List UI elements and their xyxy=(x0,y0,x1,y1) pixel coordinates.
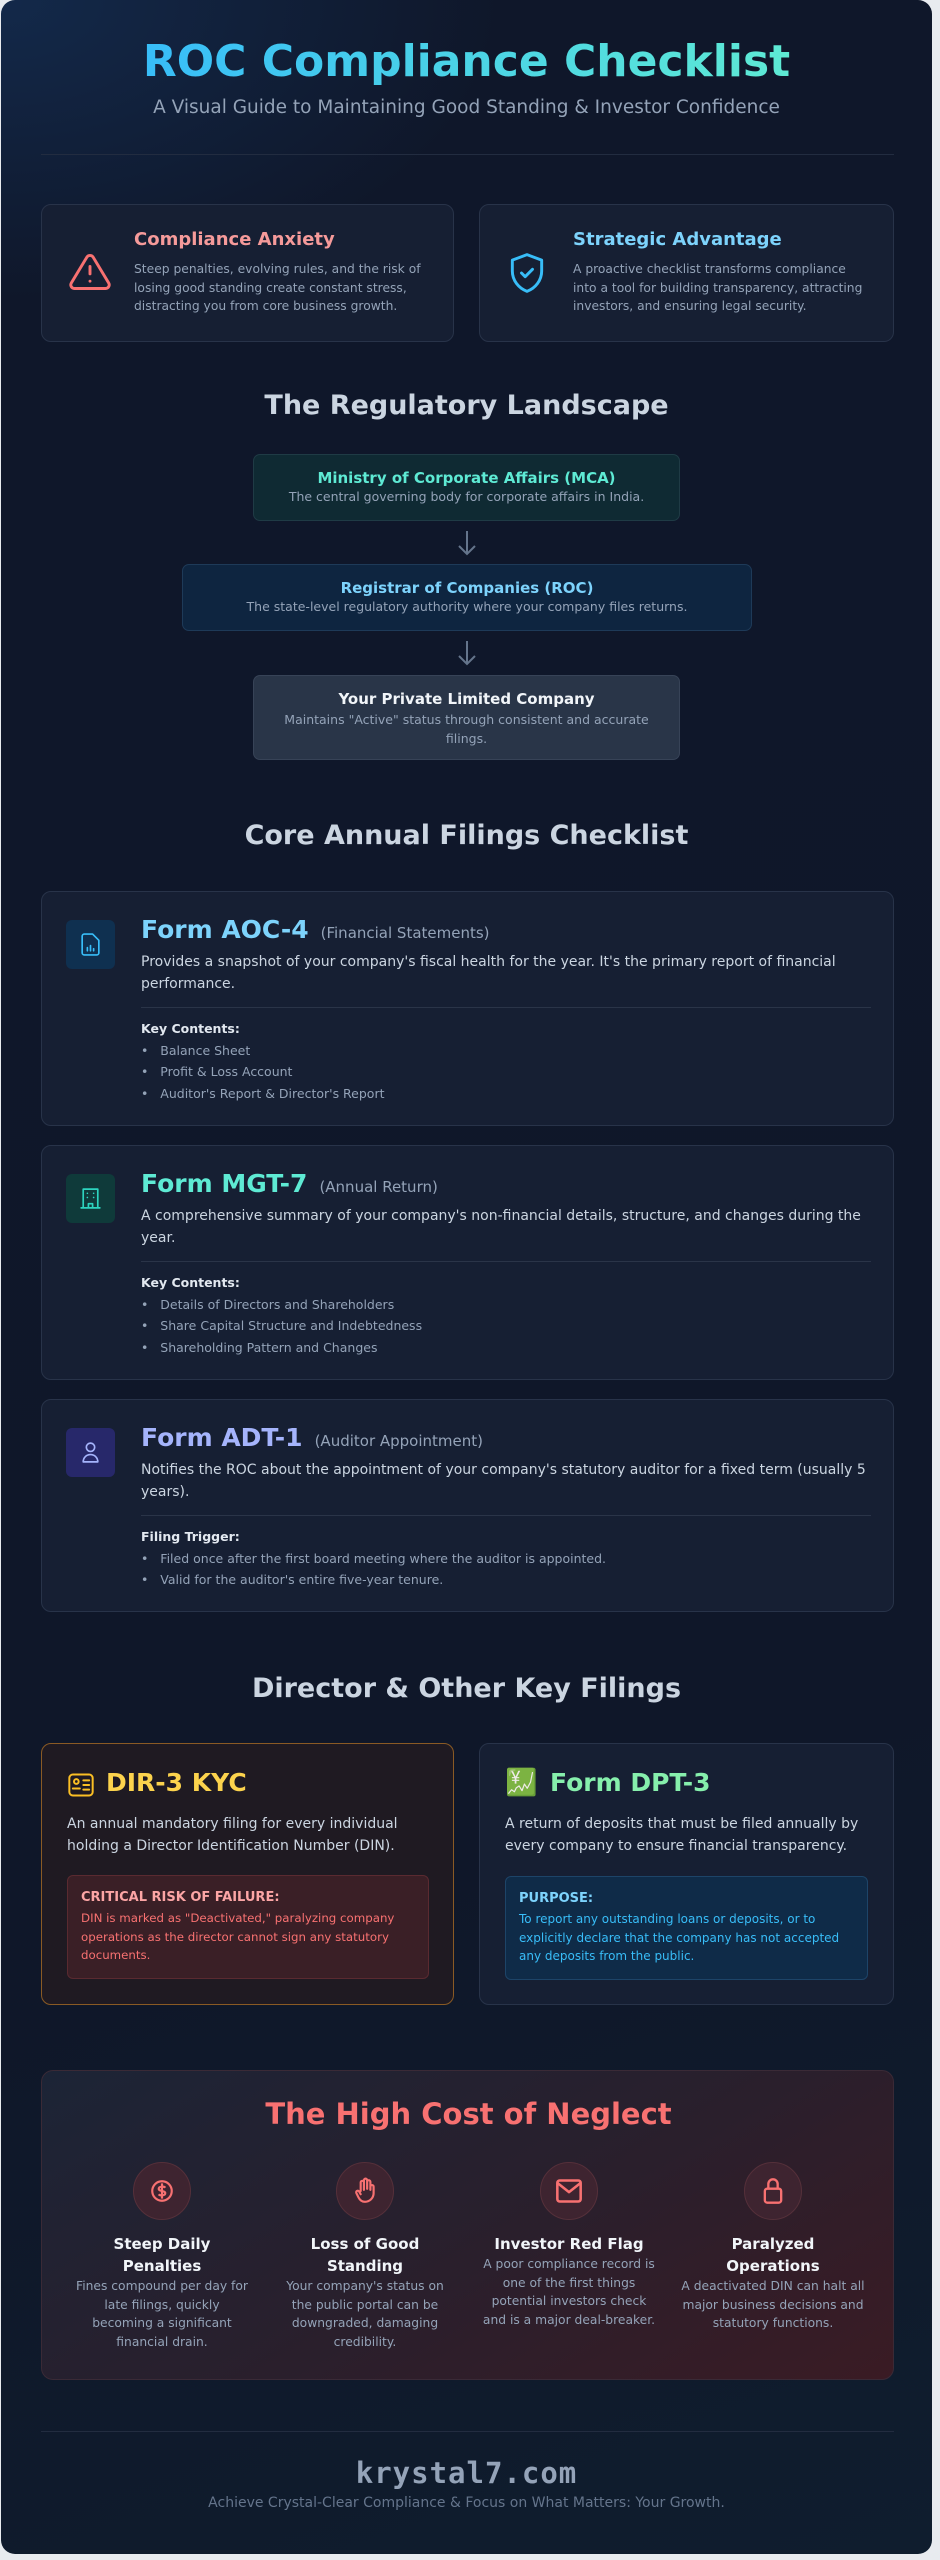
item: paralyzed xyxy=(681,2162,865,2330)
description: Notifies the ROC about the appointment of your company's statutory auditor for a fixed term (usually 5 years). xyxy=(141,1462,866,1500)
footer tagline: Achieve Crystal-Clear Compliance & Focus on What Matters: Your Growth. xyxy=(208,2495,725,2511)
title: ROC Compliance Checklist xyxy=(143,36,790,87)
key contents: • Profit & Loss Account xyxy=(141,1064,292,1079)
panel: DIR-3 KYC xyxy=(41,1743,454,2005)
key contents: Key Contents: xyxy=(141,1021,240,1036)
item: investor flag: A poor compliance record is one of the first things potential investors check and is a major deal-breaker. xyxy=(483,2257,655,2327)
heading: The High Cost of Neglect xyxy=(265,2097,672,2131)
box: company: Your Private Limited Company xyxy=(338,690,595,708)
panel: AOC-4 xyxy=(41,891,894,1126)
heading: director filings: Director & Other Key Filings xyxy=(252,1673,681,1704)
footer brand: krystal7.com xyxy=(356,2456,577,2490)
title: DIR-3 KYC xyxy=(106,1768,247,1797)
subtitle: A Visual Guide to Maintaining Good Standing & Investor Confidence xyxy=(153,97,780,118)
item: penalties: Penalties xyxy=(123,2257,201,2275)
key contents: • Auditor's Report & Director's Report xyxy=(141,1086,384,1101)
icon: document chart xyxy=(66,920,115,969)
item: penalties xyxy=(76,2162,248,2349)
description: Provides a snapshot of your company's fiscal health for the year. It's the primary report of financial performance. xyxy=(141,954,836,992)
heading: regulatory landscape: The Regulatory Landscape xyxy=(264,390,669,421)
text: A return of deposits that must be filed annually by every company to ensure financial transparency. xyxy=(505,1816,858,1854)
description: A comprehensive summary of your company's non-financial details, structure, and changes during the year. xyxy=(141,1208,861,1246)
callout: purpose: PURPOSE: xyxy=(519,1891,593,1906)
item: standing: Loss of Good xyxy=(311,2235,419,2253)
arrow xyxy=(458,531,476,556)
filing trigger xyxy=(141,1529,606,1587)
item: standing: Your company's status on the public portal can be downgraded, damaging credibility. xyxy=(286,2279,444,2349)
filing trigger: • Valid for the auditor's entire five-year tenure. xyxy=(141,1572,443,1587)
icon: building xyxy=(66,1174,115,1223)
item: penalties: Fines compound per day for late filings, quickly becoming a significant financial drain. xyxy=(76,2279,248,2349)
callout: critical risk: CRITICAL RISK OF FAILURE: xyxy=(81,1890,280,1905)
callout: purpose xyxy=(505,1876,868,1980)
icon: warning xyxy=(69,254,111,290)
item: paralyzed: Operations xyxy=(726,2257,820,2275)
key contents: Key Contents: xyxy=(141,1275,240,1290)
key contents: • Share Capital Structure and Indebtedness xyxy=(141,1318,422,1333)
icon: user xyxy=(66,1428,115,1477)
panel: high cost of neglect xyxy=(41,2070,894,2380)
text: A proactive checklist transforms compliance into a tool for building transparency, attracting investors, and ensuring legal security. xyxy=(573,262,862,313)
text: Steep penalties, evolving rules, and the risk of losing good standing create constant stress, distracting you from core business growth. xyxy=(134,262,421,313)
key contents xyxy=(141,1021,384,1101)
panel: compliance anxiety xyxy=(41,204,454,342)
icon: id card xyxy=(68,1774,94,1796)
item: paralyzed: Paralyzed xyxy=(732,2235,814,2253)
item: investor flag: Investor Red Flag xyxy=(494,2235,644,2253)
item: paralyzed: A deactivated DIN can halt all major business decisions and statutory functions. xyxy=(681,2279,865,2330)
item: standing: Standing xyxy=(327,2257,403,2275)
heading: core filings: Core Annual Filings Checklist xyxy=(245,820,688,851)
key contents: • Shareholding Pattern and Changes xyxy=(141,1340,377,1355)
form title: Form AOC-4 (Financial Statements) xyxy=(141,915,490,944)
form title: Form MGT-7 (Annual Return) xyxy=(141,1169,438,1198)
panel: ADT-1 xyxy=(41,1399,894,1612)
key contents: • Details of Directors and Shareholders xyxy=(141,1297,394,1312)
box: ROC: The state-level regulatory authority where your company files returns. xyxy=(247,599,687,614)
filing trigger: • Filed once after the first board meeting where the auditor is appointed. xyxy=(141,1551,606,1566)
icon: money: 💹 xyxy=(505,1768,537,1798)
box: company xyxy=(253,675,680,760)
key contents: • Balance Sheet xyxy=(141,1043,250,1058)
filing trigger: Filing Trigger: xyxy=(141,1529,240,1544)
box: ROC xyxy=(182,564,752,631)
key contents xyxy=(141,1275,422,1355)
box: MCA: The central governing body for corporate affairs in India. xyxy=(289,489,644,504)
item: investor flag xyxy=(483,2162,655,2327)
item: standing xyxy=(286,2162,444,2349)
panel: MGT-7 xyxy=(41,1145,894,1380)
heading: Strategic Advantage xyxy=(573,229,782,250)
callout: purpose: To report any outstanding loans or deposits, or to explicitly declare that the company has not accepted any deposits from the public. xyxy=(519,1912,839,1963)
form title: Form ADT-1 (Auditor Appointment) xyxy=(141,1423,483,1452)
panel: strategic advantage xyxy=(479,204,894,342)
callout: critical risk: DIN is marked as "Deactivated," paralyzing company operations as the director cannot sign any statutory documents. xyxy=(81,1911,394,1962)
text: An annual mandatory filing for every individual holding a Director Identification Number (DIN). xyxy=(67,1816,398,1854)
box: ROC: Registrar of Companies (ROC) xyxy=(341,579,593,597)
item: penalties: Steep Daily xyxy=(114,2235,210,2253)
title: Form DPT-3 xyxy=(550,1768,711,1797)
arrow xyxy=(458,641,476,666)
heading: Compliance Anxiety xyxy=(134,229,335,250)
panel: DPT-3 xyxy=(479,1743,894,2005)
box: MCA: Ministry of Corporate Affairs (MCA) xyxy=(317,469,616,487)
box: MCA xyxy=(253,454,680,521)
callout: critical risk xyxy=(67,1875,429,1979)
box: company: Maintains "Active" status through consistent and accurate filings. xyxy=(284,712,649,746)
icon: shield check xyxy=(510,253,544,293)
